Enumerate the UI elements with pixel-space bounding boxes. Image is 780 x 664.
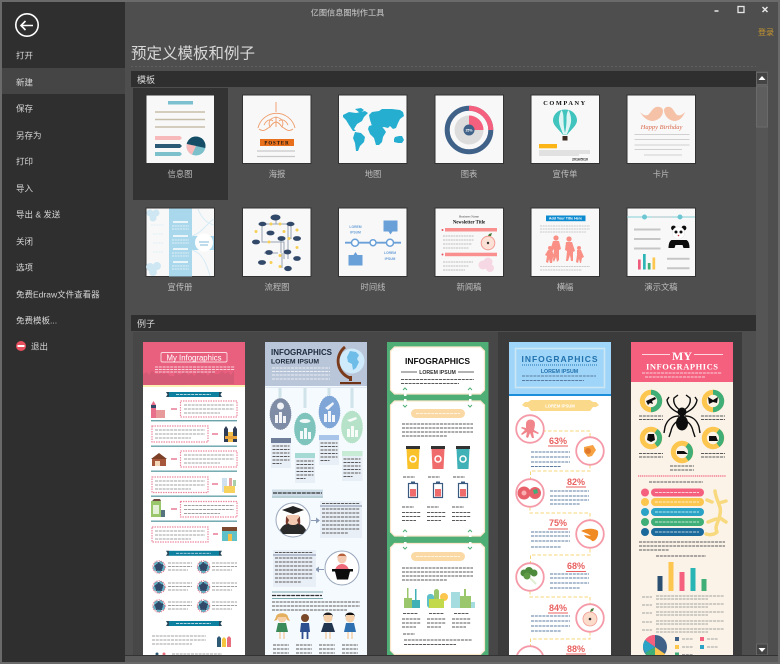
example headline xyxy=(522,356,598,373)
template: timeline: LOREM xyxy=(384,251,396,255)
icon: exit xyxy=(16,341,26,351)
label: infographic: 信息图 xyxy=(168,169,192,179)
template: poster: POSTER xyxy=(264,142,290,146)
example 2: education infographic xyxy=(265,342,367,662)
icon: graduate xyxy=(276,503,310,537)
template: banner xyxy=(531,208,600,276)
example 1: city infographic xyxy=(143,342,245,662)
label: map: 地图 xyxy=(365,169,381,179)
template: map xyxy=(338,95,407,164)
template: timeline: IPSUM xyxy=(350,230,361,234)
bar chart xyxy=(658,562,706,591)
percentage: 82%: 82% xyxy=(567,477,585,487)
page heading: 预定义模板和例子 xyxy=(131,44,255,62)
template: chart: 25% xyxy=(465,128,473,132)
template: brochure xyxy=(146,208,214,276)
pill headings xyxy=(411,409,465,561)
children figures xyxy=(274,612,356,639)
templates row one xyxy=(146,95,696,164)
icon: globe xyxy=(338,347,364,384)
example headline: INFOGRAPHICS xyxy=(522,354,598,364)
examples panel xyxy=(125,332,778,664)
batteries xyxy=(408,482,468,498)
example headline: INFOGRAPHICS xyxy=(646,362,718,372)
template: card xyxy=(627,95,696,164)
number list pills xyxy=(641,488,704,536)
label: newsletter: 新闻稿 xyxy=(457,282,481,292)
food icons xyxy=(518,420,598,626)
template: card: Happy Birthday xyxy=(640,124,682,131)
menu item: exit: 退出 xyxy=(31,342,48,352)
factories xyxy=(404,588,475,608)
selected menu highlight xyxy=(2,68,125,94)
window title: 亿图信息图制作工具 xyxy=(311,8,384,18)
section header: examples: 例子 xyxy=(137,318,155,329)
example 5: insects infographic xyxy=(631,342,733,662)
label: card: 卡片 xyxy=(653,169,669,179)
icon: speaker xyxy=(325,551,359,585)
percentage: 88%: 88% xyxy=(567,644,585,654)
template labels row one xyxy=(168,169,669,179)
menu item: new: 新建 xyxy=(16,78,34,88)
template: presentation xyxy=(627,208,696,276)
icon: back arrow xyxy=(16,14,38,36)
menu item: free viewer: 免费Edraw文件查看器 xyxy=(16,290,100,300)
template: newsletter: Business Name xyxy=(459,214,479,218)
example headline xyxy=(271,349,332,364)
template: newsletter xyxy=(435,208,504,276)
ribbon heading: LOREM IPSUM xyxy=(545,404,575,408)
example headline: MY xyxy=(672,349,692,363)
window controls xyxy=(714,6,768,12)
percentage: 68%: 68% xyxy=(567,561,585,571)
building icons xyxy=(151,401,237,541)
template: flyer xyxy=(531,95,600,164)
example headline: LOREM IPSUM xyxy=(271,358,319,366)
example headline: LOREM IPSUM xyxy=(541,369,579,375)
example headline xyxy=(406,358,470,374)
percentage: 75%: 75% xyxy=(549,518,567,528)
section header: examples xyxy=(131,315,756,331)
template: chart xyxy=(435,95,504,164)
menu item: import: 导入 xyxy=(16,184,34,194)
menu item: close: 关闭 xyxy=(16,236,33,246)
login link: 登录 xyxy=(758,27,774,37)
scrollbar xyxy=(756,71,768,655)
example headline xyxy=(646,352,718,370)
template: infographic xyxy=(146,95,214,164)
menu item: options: 选项 xyxy=(16,262,34,272)
donut charts xyxy=(642,392,722,461)
template: timeline: IPSUM xyxy=(385,257,396,261)
menu item: free templates: 免费模板... xyxy=(16,316,57,326)
template: timeline: LOREM xyxy=(349,225,362,229)
template: timeline xyxy=(338,208,407,276)
icon: gecko xyxy=(706,491,726,535)
selected template tile xyxy=(133,88,228,200)
example 3: environment infographic xyxy=(387,342,488,655)
example headline: LOREM IPSUM xyxy=(419,370,456,376)
label: presentation: 演示文稿 xyxy=(644,282,678,292)
section header: templates: 模板 xyxy=(137,74,155,85)
section header: templates xyxy=(131,71,756,87)
template: banner: Add Your Title Here xyxy=(549,217,582,221)
percentage: 63%: 63% xyxy=(549,436,567,446)
template labels row two xyxy=(168,282,678,292)
pie legend xyxy=(675,637,718,656)
label: timeline: 时间线 xyxy=(361,282,385,292)
menu item: save: 保存 xyxy=(16,104,34,114)
example headline: INFOGRAPHICS xyxy=(271,348,333,357)
template: poster xyxy=(242,95,311,164)
label: chart: 图表 xyxy=(461,169,478,179)
label: brochure: 宣传册 xyxy=(168,282,192,292)
circular stat rings xyxy=(154,562,208,611)
ribbon heading xyxy=(522,400,599,411)
menu item: open: 打开 xyxy=(16,50,34,60)
menu item: print: 打印 xyxy=(16,156,33,166)
label: poster: 海报 xyxy=(269,169,285,179)
menu item: save as: 另存为 xyxy=(16,130,42,140)
template: flyer: COMPANY xyxy=(543,100,587,107)
icon: spider xyxy=(664,395,700,437)
example title box: My Infographics xyxy=(166,354,222,362)
label: flowchart: 流程图 xyxy=(265,282,289,292)
recycling bins xyxy=(406,446,470,469)
template: flowchart xyxy=(242,208,311,276)
pie chart xyxy=(643,635,667,655)
sidebar menu xyxy=(2,2,125,662)
label: banner: 横幅 xyxy=(557,282,573,292)
example 4: food percentages infographic xyxy=(509,342,611,664)
example headline: INFOGRAPHICS xyxy=(405,356,470,366)
template: flyer: 2016/5/10 xyxy=(572,158,588,162)
menu item: export and send: 导出 & 发送 xyxy=(16,210,61,220)
label: flyer: 宣传单 xyxy=(553,169,577,179)
template: newsletter: Newsletter Title xyxy=(453,220,485,226)
percentage: 84%: 84% xyxy=(549,603,567,613)
templates row two xyxy=(146,208,696,276)
